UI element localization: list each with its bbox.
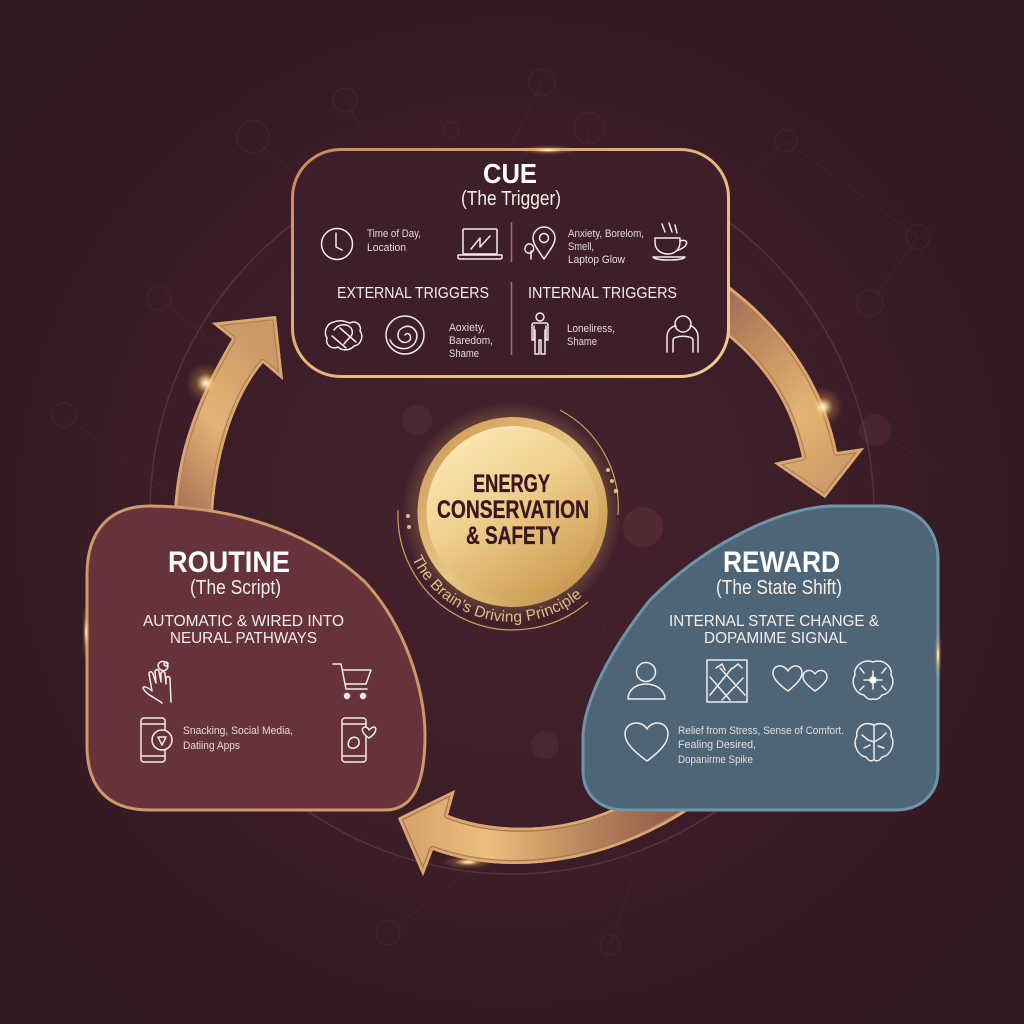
icon: hand tapping	[143, 660, 171, 703]
text: internal state change	[669, 613, 879, 647]
text: aoxiety list	[449, 322, 493, 360]
text: anxiety list	[568, 228, 644, 266]
text: aoxiety list: Aoxiety,	[449, 322, 485, 334]
panel: reward	[583, 506, 942, 810]
text: relief list: Relief from Stress, Sense of Comfort.	[678, 725, 844, 737]
text: loneliness	[567, 323, 615, 348]
text: internal state change: DOPAMIME SIGNAL	[704, 630, 847, 647]
icon: phone with badge	[141, 718, 172, 762]
icon: spiral	[386, 316, 424, 354]
text: automatic and wired: AUTOMATIC & WIRED INTO	[143, 613, 344, 630]
text: aoxiety list: Baredom,	[449, 335, 493, 347]
icon: person bust	[667, 316, 698, 352]
icon: location pin	[525, 227, 555, 259]
icon: standing person	[532, 313, 548, 354]
icon: laptop	[458, 229, 502, 259]
text: anxiety list: Anxiety, Borelom,	[568, 228, 644, 240]
medallion text: & SAFETY	[466, 522, 560, 550]
text: time of day	[367, 228, 421, 254]
large orbit ring	[150, 150, 874, 874]
text: time of day: Location	[367, 242, 406, 254]
medallion text: ENERGY	[473, 470, 550, 498]
medallion orbit arcs and dots	[398, 410, 618, 630]
arrow: routine to cue	[174, 316, 283, 512]
icon: two hearts	[773, 666, 827, 691]
curved caption: The Brain’s Driving Principle	[414, 554, 581, 625]
icon: large heart	[625, 723, 668, 761]
center medallion	[397, 406, 619, 631]
medallion text: CONSERVATION	[437, 496, 589, 524]
text: relief list: Fealing Desired,	[678, 739, 756, 751]
text: relief list: Dopanirme Spike	[678, 754, 753, 766]
icon: glowing brain	[853, 661, 893, 699]
arrow: cue to reward	[725, 283, 864, 498]
text: automatic and wired	[143, 613, 344, 647]
subheading: the script: (The Script)	[190, 577, 281, 599]
background neural network	[52, 69, 940, 955]
heading: cue: CUE	[483, 158, 537, 189]
icon: phone with heart	[342, 718, 376, 762]
text: automatic and wired: NEURAL PATHWAYS	[170, 630, 317, 647]
subheading: the trigger: (The Trigger)	[461, 188, 561, 210]
icon: clock	[322, 228, 352, 260]
text: anxiety list: Laptop Glow	[568, 254, 625, 266]
icon: brain	[855, 724, 893, 761]
text: aoxiety list: Shame	[449, 348, 479, 360]
icon: knot	[325, 321, 362, 350]
text: loneliness: Shame	[567, 336, 597, 348]
infographic canvas	[52, 68, 942, 956]
heading: external triggers: EXTERNAL TRIGGERS	[337, 285, 489, 302]
text: relief list	[678, 725, 844, 766]
text: snacking list: Datiing Apps	[183, 740, 240, 752]
heading: internal triggers: INTERNAL TRIGGERS	[528, 285, 677, 302]
icon: person	[628, 662, 665, 699]
heading: reward: REWARD	[723, 546, 840, 579]
medallion text	[437, 470, 589, 550]
text: loneliness: Loneliress,	[567, 323, 615, 335]
text: snacking list	[183, 725, 293, 752]
divider: top	[510, 222, 512, 355]
text: time of day: Time of Day,	[367, 228, 421, 240]
heading: routine: ROUTINE	[168, 546, 290, 579]
icon: shopping cart	[333, 664, 371, 698]
medallion disc	[418, 417, 608, 607]
text: anxiety list: Smell,	[568, 241, 594, 253]
text: internal state change: INTERNAL STATE CHANGE &	[669, 613, 879, 630]
text: snacking list: Snacking, Social Media,	[183, 725, 293, 737]
icon: coffee cup	[653, 223, 687, 260]
panel: routine	[82, 506, 425, 810]
panel: cue	[292, 145, 728, 376]
arrow: reward to routine	[398, 790, 695, 876]
icon: crossed box	[707, 660, 747, 702]
subheading: the state shift: (The State Shift)	[716, 577, 842, 599]
